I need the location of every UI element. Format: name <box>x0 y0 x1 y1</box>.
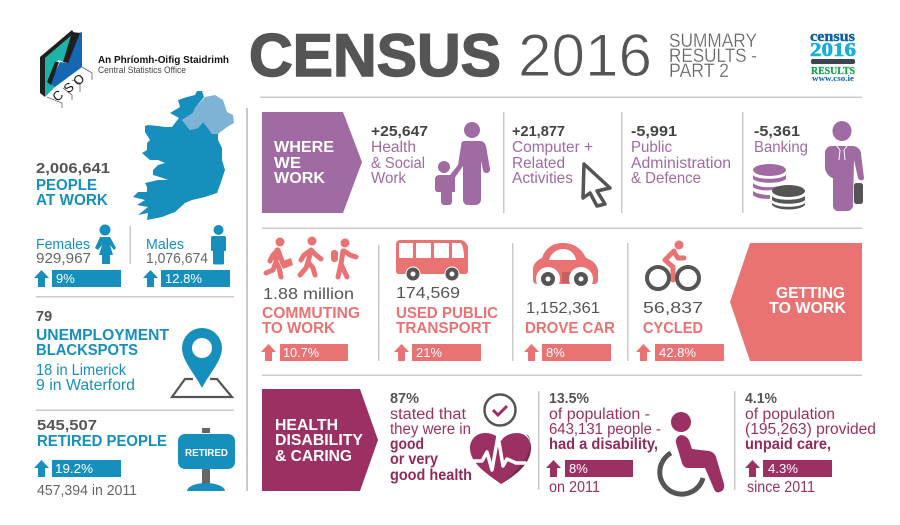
stat: disability: 643,131 people - <box>549 421 661 438</box>
stat: public administration and defence: Public <box>631 139 672 156</box>
text: office name: Central Statistics Office <box>98 65 186 75</box>
unemployment blackspots: 79 <box>36 309 52 325</box>
people at work <box>36 160 110 209</box>
stat: unpaid care: since 2011 <box>747 479 815 496</box>
females: 929,967 <box>36 250 91 267</box>
icon: car <box>533 243 598 291</box>
text: office name: An Phríomh-Oifig Staidrimh <box>98 54 229 66</box>
stat: computer and related activities: Activities <box>512 170 573 187</box>
arrow up <box>34 270 49 287</box>
stat: computer and related activities <box>512 123 610 206</box>
retired people: 545,507 <box>37 418 97 434</box>
census 2016 results logo <box>810 29 856 83</box>
stat: used public transport: 174,569 <box>396 285 460 302</box>
banner: where we work: WE <box>274 155 301 172</box>
icon: cursor <box>583 164 610 206</box>
icon: businessman <box>825 121 864 211</box>
Northern Ireland <box>182 95 234 134</box>
stat: drove car: DROVE CAR <box>525 320 615 337</box>
unemployment blackspots: BLACKSPOTS <box>36 342 138 359</box>
banner: where we work: WHERE <box>274 139 334 156</box>
stat: good health: good <box>390 436 424 453</box>
icon: retired sign: RETIRED <box>185 447 228 459</box>
title: CENSUS <box>249 22 501 89</box>
census 2016 results logo: census <box>810 29 855 45</box>
stat: commuting to work: TO WORK <box>262 320 336 337</box>
stat: computer and related activities: Computer + <box>512 139 593 156</box>
stat: computer and related activities: Related <box>512 155 565 172</box>
stat: commuting to work: COMMUTING <box>262 305 360 322</box>
arrow up <box>34 460 49 477</box>
icon: wheelchair <box>660 412 724 494</box>
census 2016 results logo: 2016 <box>810 39 856 61</box>
females: Females <box>36 236 90 253</box>
bar: 9%: 9% <box>56 271 75 286</box>
stat: disability: 13.5% <box>549 390 589 407</box>
stat: unpaid care: 4.1% <box>745 390 777 407</box>
icon: map pin <box>172 328 232 397</box>
bar: 19.2% <box>52 460 121 477</box>
census 2016 results logo: www.cso.ie <box>812 74 855 83</box>
stat: disability: on 2011 <box>549 479 600 496</box>
stat: banking: Banking <box>754 139 808 156</box>
stat: unpaid care: (195,263) provided <box>745 421 876 438</box>
stat: good health: or very <box>390 451 438 468</box>
stat: commuting to work: 1.88 million <box>263 286 354 303</box>
males: 1,076,674 <box>146 250 208 267</box>
stat: good health: 87% <box>390 390 419 407</box>
panel: getting to work <box>261 236 862 361</box>
icon: CSO isometric mark: O <box>70 71 87 89</box>
stat: used public transport <box>394 240 498 361</box>
stat: health and social work: & Social <box>371 155 425 172</box>
stat: good health <box>390 390 531 484</box>
Republic of Ireland <box>133 91 225 220</box>
stat: unpaid care: of population <box>745 406 835 423</box>
stat: cycled <box>636 240 724 361</box>
subtitle: SUMMARY <box>669 31 757 52</box>
stat: public administration and defence <box>631 123 731 187</box>
unemployment blackspots: 18 in Limerick <box>36 362 126 379</box>
banner: where we work <box>262 112 362 213</box>
bar: 8% <box>565 460 633 477</box>
people at work: AT WORK <box>36 192 109 209</box>
subtitle <box>669 31 757 82</box>
stat: good health: stated that <box>390 406 467 423</box>
stat: drove car <box>524 243 615 361</box>
icon: bus <box>396 240 468 281</box>
bar: 42.8%: 42.8% <box>659 345 696 360</box>
bar: 12.8%: 12.8% <box>165 271 202 286</box>
stat: health and social work <box>371 122 490 205</box>
subtitle: PART 2 <box>669 61 729 82</box>
arrow up <box>636 344 651 361</box>
icon: check circle <box>484 394 516 426</box>
stat: health and social work: Work <box>371 170 407 187</box>
stat: computer and related activities: +21,877 <box>512 123 565 140</box>
banner: getting to work <box>730 243 862 361</box>
banner: getting to work: GETTING <box>776 285 845 302</box>
stat: unpaid care <box>745 390 876 496</box>
stat: drove car: 1,152,361 <box>526 300 600 317</box>
stat: commuting to work <box>261 236 360 361</box>
stat: disability: of population - <box>549 406 650 423</box>
stat: cycled: CYCLED <box>643 320 703 337</box>
arrow up <box>546 460 561 477</box>
title <box>249 22 652 89</box>
females <box>34 224 121 287</box>
arrow up <box>261 344 276 361</box>
stat: public administration and defence: -5,991 <box>631 123 677 140</box>
icon: CSO isometric mark: S <box>61 79 77 96</box>
banner: health disability and caring <box>262 389 378 491</box>
banner: where we work: WORK <box>274 170 325 187</box>
bar: 10.7%: 10.7% <box>283 345 319 360</box>
arrow up <box>394 344 409 361</box>
icon: adult and child <box>435 122 490 205</box>
title: 2016 <box>518 22 652 89</box>
stat: public administration and defence: Administration <box>631 155 731 172</box>
icon: retired sign <box>178 428 235 491</box>
stat: disability: had a disability, <box>549 436 658 453</box>
map of Ireland <box>133 91 234 220</box>
stat: cycled: 56,837 <box>643 300 703 317</box>
bar: 8%: 8% <box>546 345 565 360</box>
CSO logo <box>40 30 229 108</box>
stat: good health: they were in <box>390 421 471 438</box>
bar: 19.2%: 19.2% <box>55 461 93 476</box>
unemployment blackspots <box>36 309 232 397</box>
people at work: PEOPLE <box>36 177 97 194</box>
arrow up <box>143 270 158 287</box>
stat: unpaid care: unpaid care, <box>745 436 831 453</box>
retired people: RETIRED PEOPLE <box>37 433 167 450</box>
stat: health and social work: Health <box>371 139 416 156</box>
stat: used public transport: TRANSPORT <box>396 320 492 337</box>
banner: health disability and caring: HEALTH <box>275 417 338 434</box>
stat: used public transport: USED PUBLIC <box>396 305 498 322</box>
text: office name <box>98 54 229 75</box>
bar: 8%: 8% <box>569 461 588 476</box>
stat: disability <box>546 390 724 496</box>
panel: where we work <box>262 112 864 213</box>
icon: CSO isometric mark <box>40 30 92 108</box>
stat: banking: -5,361 <box>754 123 800 140</box>
stat: health and social work: +25,647 <box>371 123 428 140</box>
retired people <box>34 418 235 499</box>
bar: 4.3%: 4.3% <box>768 461 798 476</box>
banner: health disability and caring: DISABILITY <box>275 432 363 449</box>
unemployment blackspots: UNEMPLOYMENT <box>36 327 170 344</box>
icon: cyclist <box>647 240 699 289</box>
subtitle: RESULTS - <box>669 46 757 67</box>
males <box>143 225 230 287</box>
bar: 21%: 21% <box>416 345 442 360</box>
census 2016 results logo: RESULTS <box>811 66 855 77</box>
stat: good health: good health <box>390 467 472 484</box>
icon: heart with pulse <box>470 433 531 484</box>
icon: man <box>211 225 226 264</box>
panel: health disability and caring <box>262 389 876 496</box>
males: Males <box>146 236 184 253</box>
banner: health disability and caring: & CARING <box>275 448 352 465</box>
arrow up <box>745 460 760 477</box>
banner: getting to work: TO WORK <box>769 300 847 317</box>
retired people: 457,394 in 2011 <box>37 483 137 499</box>
people at work: 2,006,641 <box>36 160 110 177</box>
icon: CSO isometric mark: C <box>49 87 66 104</box>
stat: banking <box>753 121 864 211</box>
unemployment blackspots: 9 in Waterford <box>36 377 135 394</box>
arrow up <box>524 344 539 361</box>
icon: walkers <box>266 236 356 277</box>
icon: woman <box>95 224 116 264</box>
stat: public administration and defence: & Defence <box>631 170 701 187</box>
icon: coins <box>753 164 805 210</box>
